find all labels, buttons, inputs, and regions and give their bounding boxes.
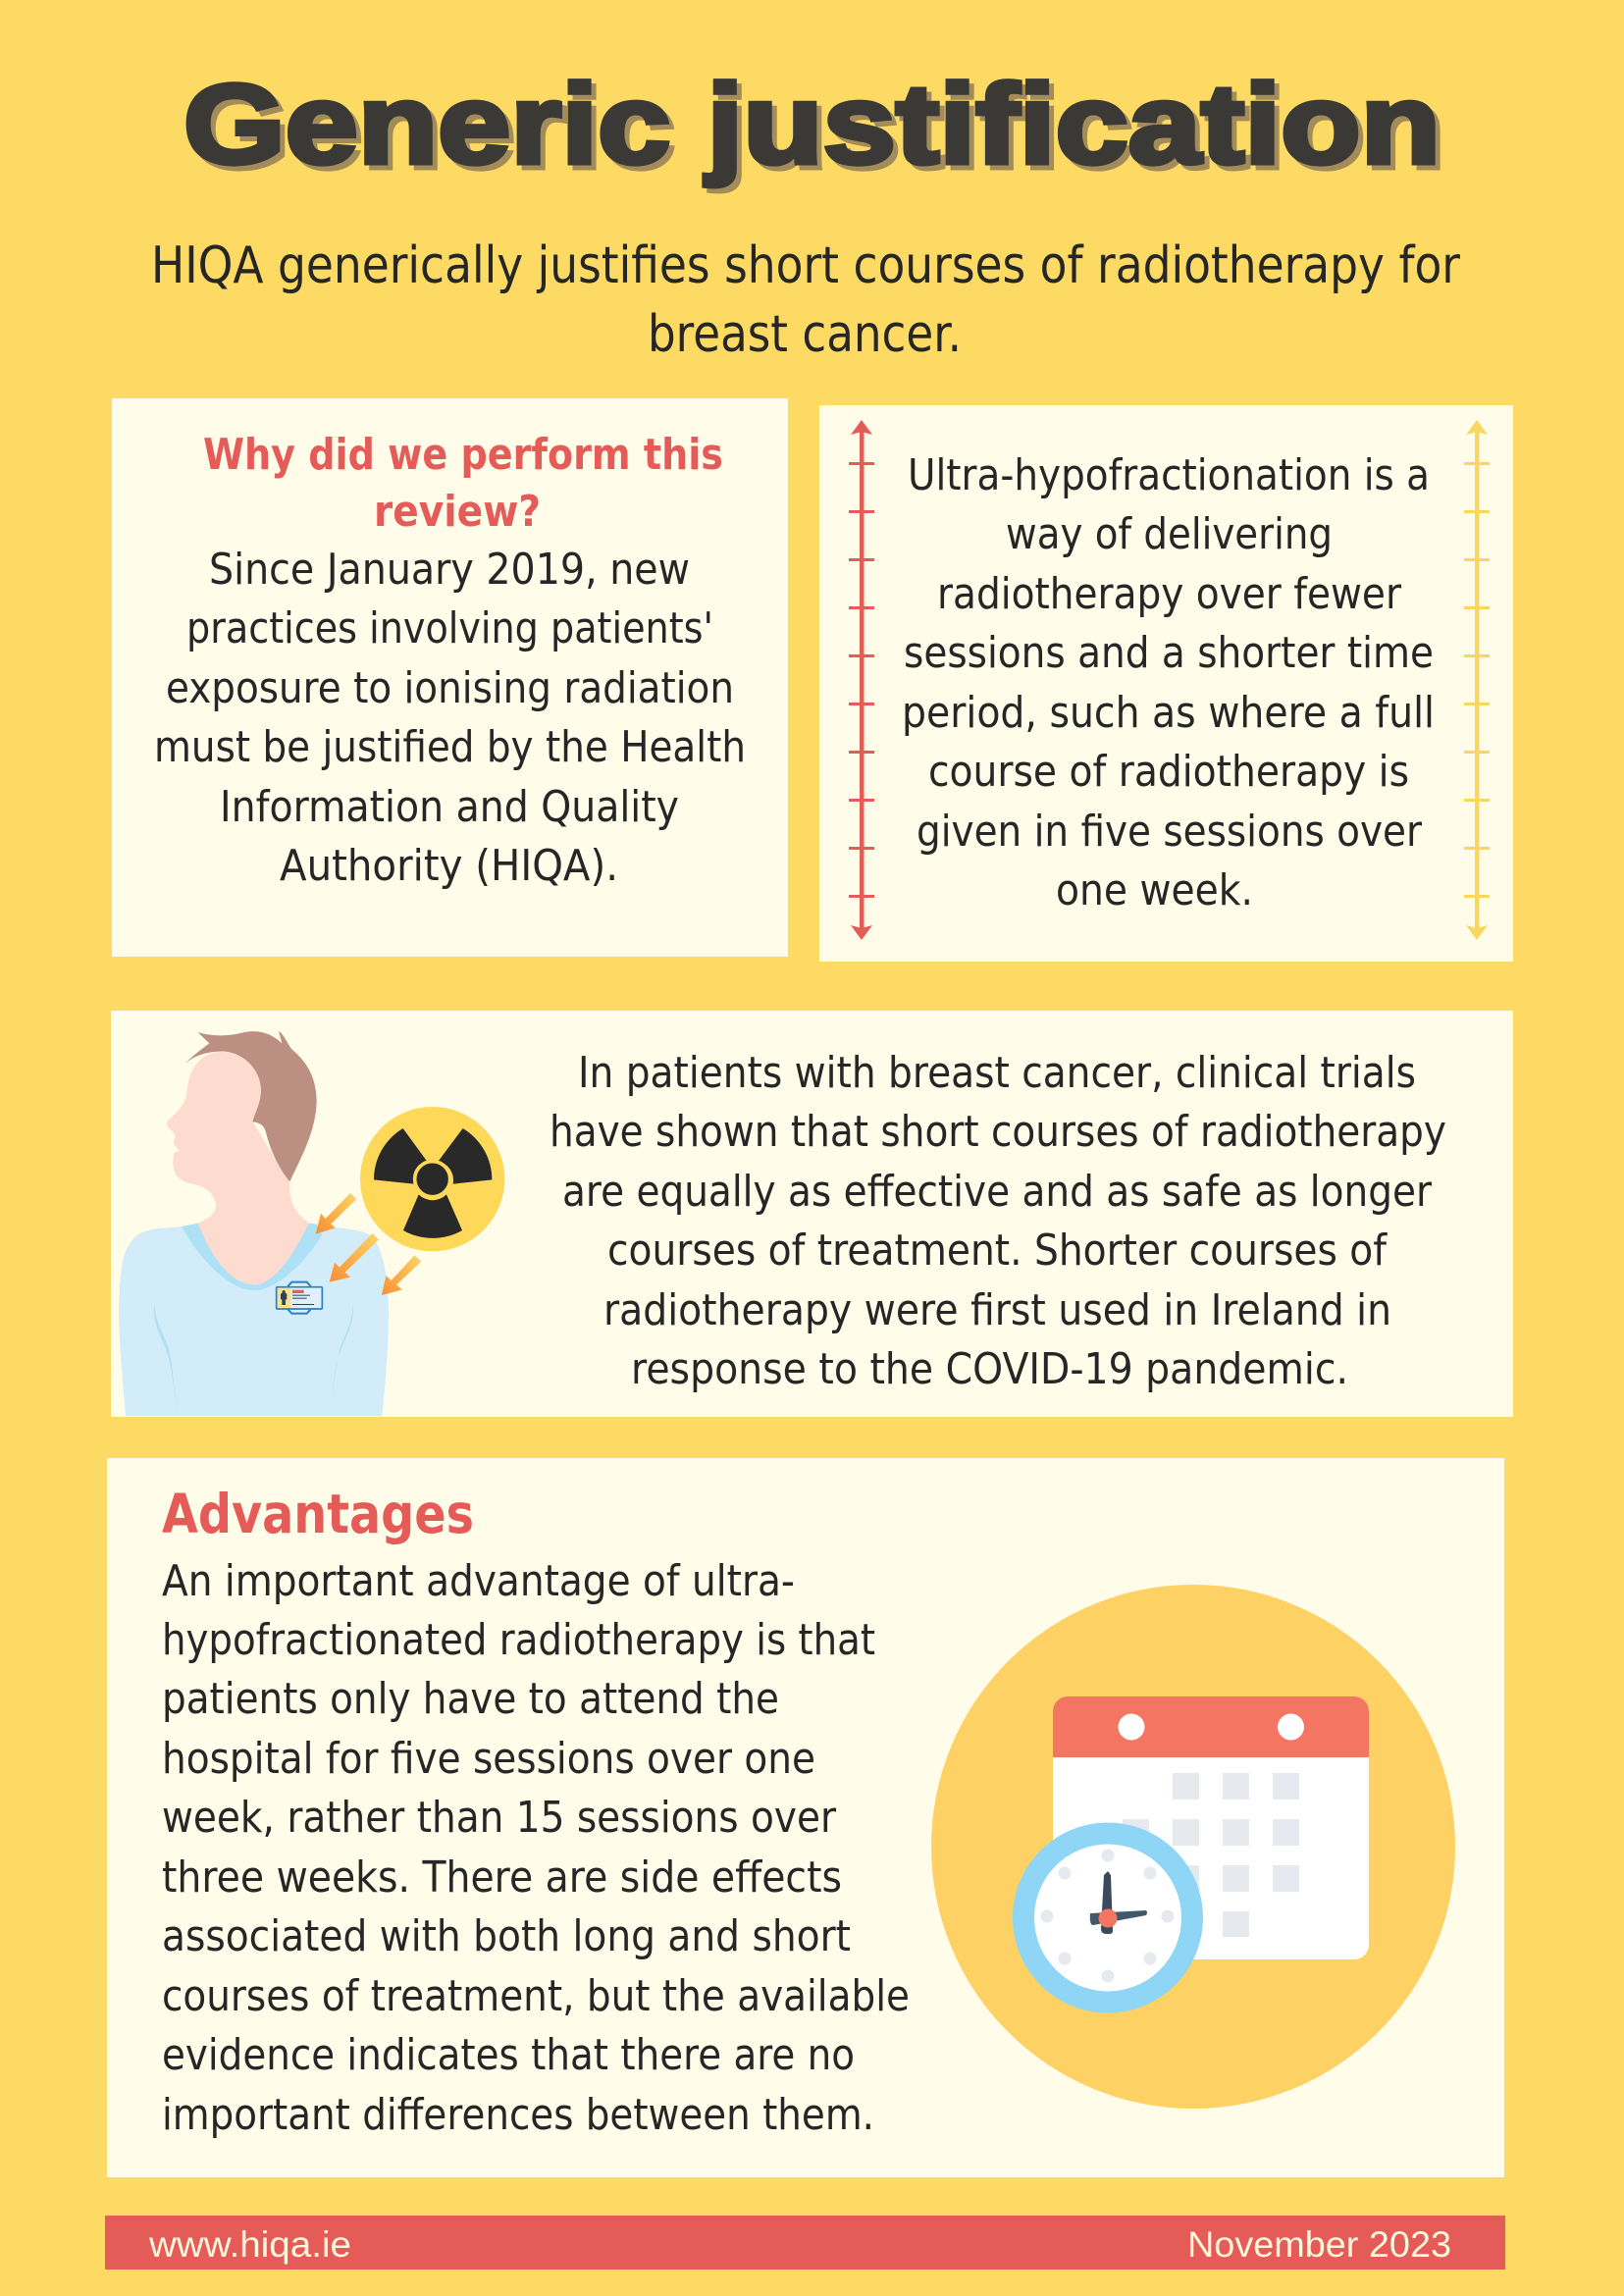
text block: ultra-hypofractionation definition: way of delivering	[1006, 509, 1333, 559]
text block: advantages body: important differences between them.	[162, 2090, 874, 2140]
text block: ultra-hypofractionation definition: given in five sessions over	[917, 807, 1423, 857]
shirt creases	[154, 1302, 353, 1416]
panel: ultra-hypofractionation	[819, 405, 1513, 962]
arrow: radiation to shoulder	[316, 1193, 356, 1234]
text block: advantages body: hospital for five sessions over one	[162, 1734, 815, 1784]
text block: advantages body: evidence indicates that there are no	[162, 2030, 855, 2080]
shirt	[119, 1224, 389, 1416]
text block: ultra-hypofractionation definition: period, such as where a full	[902, 688, 1435, 738]
text block: advantages body: An important advantage of ultra-	[162, 1556, 795, 1606]
subtitle: HIQA generically justifies short courses of radiotherapy for	[151, 236, 1461, 295]
text block: why review body: Since January 2019, new	[209, 545, 690, 595]
icon: id badge	[277, 1282, 322, 1314]
footer: date: November 2023	[1187, 2224, 1451, 2265]
title: Generic justification	[183, 62, 1441, 187]
icon: radiation symbol	[360, 1107, 504, 1251]
arrow: radiation to arm	[382, 1255, 421, 1295]
text block: advantages body: patients only have to attend the	[162, 1674, 779, 1724]
text block: why review body: Information and Quality	[220, 782, 679, 832]
text block: clinical trials: radiotherapy were first used in Ireland in	[603, 1285, 1391, 1335]
text block: clinical trials: response to the COVID-19 pandemic.	[631, 1344, 1348, 1394]
text block: advantages body: associated with both long and short	[162, 1911, 851, 1961]
heading: why review: Why did we perform this	[203, 430, 723, 480]
subtitle	[151, 236, 1461, 364]
text block: clinical trials: courses of treatment. Shorter courses of	[607, 1226, 1388, 1276]
text block: why review body: must be justified by the Health	[154, 722, 746, 772]
subtitle: breast cancer.	[648, 305, 962, 364]
text block: clinical trials: In patients with breast cancer, clinical trials	[578, 1048, 1416, 1098]
clock	[1013, 1823, 1203, 2013]
heading: why review	[203, 430, 723, 537]
text block: why review body: Authority (HIQA).	[280, 841, 618, 891]
panel: clinical trials	[111, 1011, 1513, 1417]
head and neck	[167, 1052, 309, 1284]
text block: ultra-hypofractionation definition: one week.	[1056, 865, 1253, 915]
text block: clinical trials: are equally as effective and as safe as longer	[562, 1167, 1433, 1217]
arrow: radiation to chest	[330, 1233, 379, 1282]
hair	[184, 1031, 317, 1181]
text block: ultra-hypofractionation definition	[902, 450, 1435, 915]
heading: why review: review?	[374, 487, 541, 537]
illustration: patient and radiation	[119, 1031, 504, 1416]
text block: why review body: exposure to ionising radiation	[166, 663, 734, 713]
text block: advantages body: three weeks. There are side effects	[162, 1852, 842, 1903]
text block: ultra-hypofractionation definition: course of radiotherapy is	[928, 747, 1409, 797]
text block: ultra-hypofractionation definition: Ultra-hypofractionation is a	[908, 450, 1430, 500]
icon: yellow scale arrow	[1464, 420, 1490, 940]
text block: advantages body: courses of treatment, but the available	[162, 1971, 910, 2021]
footer bar	[105, 2216, 1505, 2270]
panel: advantages	[107, 1458, 1504, 2177]
collar	[182, 1224, 322, 1290]
icon: calendar and clock	[931, 1585, 1455, 2109]
icon: red scale arrow	[849, 420, 874, 940]
footer: website: www.hiqa.ie	[148, 2224, 351, 2265]
text block: clinical trials	[550, 1048, 1446, 1394]
text block: ultra-hypofractionation definition: sessions and a shorter time	[904, 628, 1434, 678]
heading: advantages: Advantages	[162, 1483, 474, 1545]
text block: advantages body	[162, 1556, 910, 2140]
panel: why did we perform this review	[112, 398, 788, 957]
text block: advantages body: hypofractionated radiotherapy is that	[162, 1615, 875, 1665]
text block: advantages body: week, rather than 15 sessions over	[162, 1793, 837, 1843]
text block: why review body	[154, 545, 746, 891]
text block: clinical trials: have shown that short courses of radiotherapy	[550, 1107, 1446, 1157]
text block: why review body: practices involving patients'	[186, 603, 713, 653]
calendar	[1053, 1696, 1369, 1959]
text block: ultra-hypofractionation definition: radiotherapy over fewer	[937, 569, 1402, 619]
